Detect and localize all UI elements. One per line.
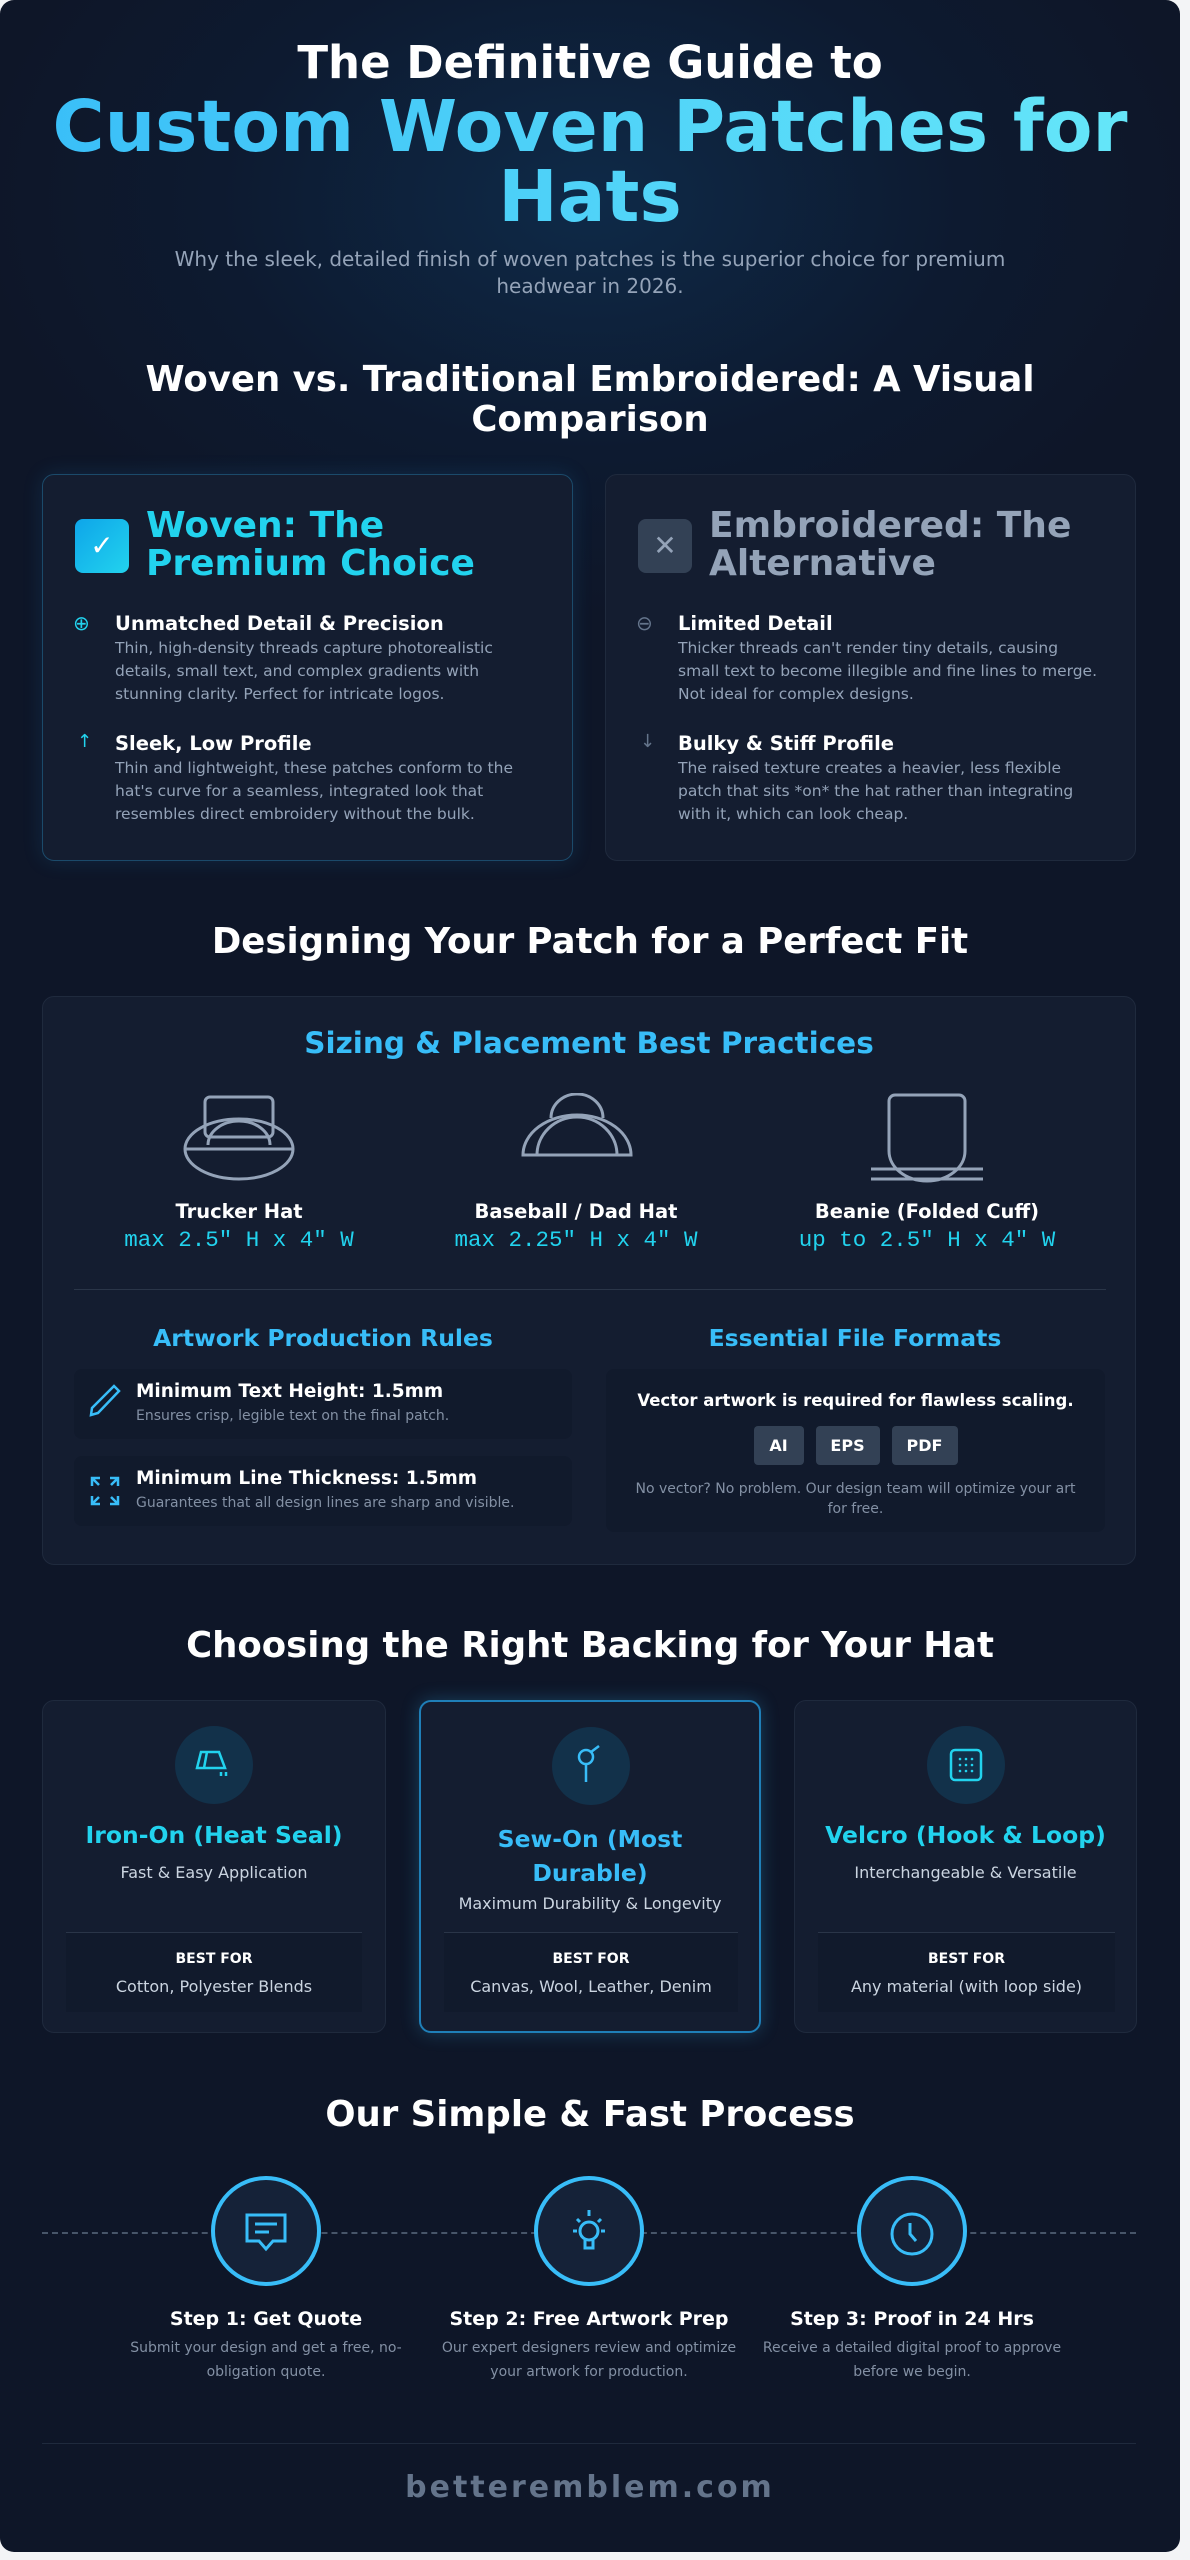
card: iron-on: Iron-On (Heat Seal) bbox=[86, 1821, 342, 1849]
card: sew-on: Maximum Durability & Longevity bbox=[459, 1894, 721, 1913]
formats box bbox=[606, 1369, 1105, 1532]
feature: bulky bbox=[640, 731, 1073, 823]
title: Hats bbox=[498, 155, 682, 238]
icon: trucker hat bbox=[184, 1096, 294, 1180]
rule: line thickness: Guarantees that all design lines are sharp and visible. bbox=[136, 1495, 514, 1511]
icon: x: ✕ bbox=[653, 529, 677, 562]
step 3: Step 3: Proof in 24 Hrs bbox=[790, 2308, 1034, 2330]
rule: line thickness: Minimum Line Thickness: 1.5mm bbox=[136, 1468, 477, 1489]
feature: limited detail: small text to become illegible and fine lines to merge. bbox=[678, 662, 1097, 680]
embroidered title: Alternative bbox=[709, 543, 936, 584]
woven title: Premium Choice bbox=[146, 543, 475, 584]
format badges: EPS bbox=[830, 1436, 865, 1455]
embroidered title bbox=[709, 505, 1071, 584]
trucker label: Trucker Hat bbox=[175, 1200, 303, 1223]
feature: detail bbox=[73, 611, 493, 703]
trucker label bbox=[124, 1200, 354, 1253]
icon: velcro grid bbox=[927, 1726, 1005, 1804]
card: sew-on: Sew-On (Most bbox=[498, 1825, 682, 1853]
panel: woven bbox=[42, 474, 573, 861]
rule: text height: Ensures crisp, legible text on the final patch. bbox=[136, 1408, 449, 1424]
rule: text height: Minimum Text Height: 1.5mm bbox=[136, 1381, 443, 1402]
feature: limited detail bbox=[636, 611, 1097, 703]
card: velcro bbox=[794, 1700, 1137, 2033]
title bbox=[52, 36, 1128, 238]
best for: Any material (with loop side) bbox=[851, 1977, 1082, 1996]
best for: BEST FOR bbox=[552, 1951, 630, 1967]
feature: detail: ⊕ bbox=[73, 611, 90, 635]
feature: profile: Thin and lightweight, these patches conform to the hat's curve for a seamless, integrated look that resembles direct embroidery without the bulk. bbox=[115, 759, 513, 823]
feature: bulky: The raised texture creates a heavier, less flexible bbox=[678, 759, 1061, 777]
baseball label: max 2.25″ H x 4″ W bbox=[454, 1227, 698, 1253]
panel: embroidered bbox=[605, 474, 1136, 861]
icon: clock bbox=[857, 2176, 967, 2286]
icon: needle bbox=[552, 1727, 630, 1805]
formats box: Vector artwork is required for flawless scaling. bbox=[637, 1391, 1074, 1410]
best for: BEST FOR bbox=[928, 1951, 1005, 1967]
icon: baseball hat bbox=[522, 1093, 632, 1156]
step 2: your artwork for production. bbox=[490, 2364, 688, 2380]
format badges bbox=[754, 1426, 958, 1465]
card: sew-on: Durable) bbox=[532, 1859, 648, 1887]
step 2 bbox=[442, 2176, 736, 2380]
feature: bulky: with it, which can look cheap. bbox=[678, 805, 908, 823]
icon: check: ✓ bbox=[90, 529, 114, 562]
feature: limited detail: Thicker threads can't render tiny details, causing bbox=[678, 639, 1058, 657]
feature: profile bbox=[77, 731, 513, 823]
step 2: Our expert designers review and optimize bbox=[442, 2340, 736, 2356]
step 1: Step 1: Get Quote bbox=[170, 2308, 362, 2330]
rule: line thickness bbox=[74, 1456, 572, 1526]
icon: bulb bbox=[534, 2176, 644, 2286]
feature: limited detail: Limited Detail bbox=[678, 612, 833, 635]
feature: limited detail: Not ideal for complex designs. bbox=[678, 685, 914, 703]
card: velcro: Velcro (Hook & Loop) bbox=[825, 1821, 1106, 1849]
footer: betteremblem.com bbox=[405, 2470, 775, 2505]
beanie label: up to 2.5″ H x 4″ W bbox=[799, 1227, 1055, 1253]
card: iron-on: Fast & Easy Application bbox=[120, 1863, 308, 1882]
icon: chat bbox=[211, 2176, 321, 2286]
embroidered title: Embroidered: The bbox=[709, 505, 1071, 546]
rule: text height bbox=[74, 1369, 572, 1439]
best for: Canvas, Wool, Leather, Denim bbox=[470, 1977, 712, 1996]
title: Custom Woven Patches for bbox=[52, 85, 1128, 168]
heading: backing: Choosing the Right Backing for Your Hat bbox=[186, 1625, 994, 1666]
step 2: Step 2: Free Artwork Prep bbox=[450, 2308, 728, 2330]
step 3 bbox=[763, 2176, 1061, 2380]
best for: BEST FOR bbox=[176, 1951, 252, 1967]
best for bbox=[444, 1932, 738, 2012]
subheading: file formats: Essential File Formats bbox=[709, 1324, 1001, 1352]
beanie label bbox=[799, 1200, 1056, 1253]
feature: limited detail: ⊖ bbox=[636, 611, 653, 635]
icon: iron bbox=[175, 1726, 253, 1804]
subtitle: Why the sleek, detailed finish of woven patches is the superior choice for premium headwear in 2026. bbox=[175, 247, 1005, 298]
best for: Cotton, Polyester Blends bbox=[116, 1977, 312, 1996]
woven title: Woven: The bbox=[146, 505, 384, 546]
woven title bbox=[146, 505, 475, 584]
heading: process: Our Simple & Fast Process bbox=[325, 2094, 855, 2135]
feature: bulky: Bulky & Stiff Profile bbox=[678, 732, 894, 755]
feature: profile: ↑ bbox=[77, 731, 92, 752]
best for bbox=[66, 1932, 362, 2012]
baseball label: Baseball / Dad Hat bbox=[475, 1200, 677, 1223]
icon: beanie bbox=[871, 1094, 983, 1182]
heading: comparison: Woven vs. Traditional Embroidered: A Visual Comparison bbox=[145, 359, 1035, 440]
format badges: PDF bbox=[907, 1436, 942, 1455]
feature: detail: Unmatched Detail & Precision bbox=[115, 612, 444, 635]
title: The Definitive Guide to bbox=[297, 36, 883, 89]
feature: profile: Sleek, Low Profile bbox=[115, 732, 312, 755]
format badges: AI bbox=[769, 1436, 788, 1455]
icon: x bbox=[638, 519, 692, 573]
feature: detail: Thin, high-density threads capture photorealistic details, small text, and complex gradients with stunning clarity. Perfect for intricate logos. bbox=[115, 639, 493, 703]
icon: check bbox=[75, 519, 129, 573]
step 3: before we begin. bbox=[853, 2364, 971, 2380]
step 1 bbox=[130, 2176, 402, 2380]
panel: sizing bbox=[42, 996, 1136, 1565]
feature: bulky: patch that sits *on* the hat rather than integrating bbox=[678, 782, 1073, 800]
sizing heading: Sizing & Placement Best Practices bbox=[304, 1026, 874, 1060]
formats box: No vector? No problem. Our design team will optimize your art for free. bbox=[636, 1481, 1075, 1517]
card: sew-on bbox=[419, 1700, 761, 2033]
step 3: Receive a detailed digital proof to approve bbox=[763, 2340, 1061, 2356]
beanie label: Beanie (Folded Cuff) bbox=[815, 1200, 1039, 1223]
feature: bulky: ↓ bbox=[640, 731, 655, 752]
best for bbox=[818, 1932, 1115, 2012]
trucker label: max 2.5″ H x 4″ W bbox=[124, 1227, 354, 1253]
baseball label bbox=[454, 1200, 698, 1253]
step 1: Submit your design and get a free, no-obligation quote. bbox=[130, 2340, 402, 2380]
subheading: artwork rules: Artwork Production Rules bbox=[153, 1324, 493, 1352]
card: iron-on bbox=[42, 1700, 386, 2033]
card: velcro: Interchangeable & Versatile bbox=[854, 1863, 1077, 1882]
heading: designing: Designing Your Patch for a Perfect Fit bbox=[212, 921, 968, 962]
